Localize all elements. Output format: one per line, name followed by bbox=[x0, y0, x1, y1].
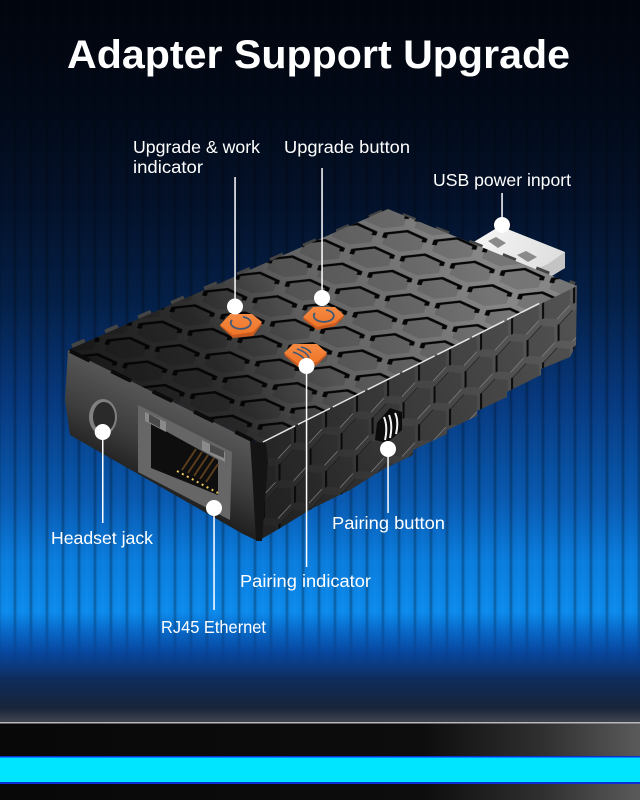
callout: upgrade button: Upgrade button bbox=[284, 137, 410, 157]
side face bbox=[250, 285, 577, 541]
callout: upgrade and work indicator bbox=[133, 137, 260, 314]
bottom bands bbox=[0, 722, 640, 800]
callout: headset jack bbox=[51, 424, 153, 548]
edge highlight bbox=[263, 303, 540, 442]
callout: upgrade and work indicator: indicator bbox=[133, 157, 203, 177]
top face with hexagon texture bbox=[68, 209, 577, 442]
front face bbox=[65, 350, 258, 541]
callout: RJ45 Ethernet bbox=[161, 500, 266, 637]
callout: upgrade and work indicator: Upgrade & work bbox=[133, 137, 260, 157]
title: Adapter Support Upgrade bbox=[67, 33, 570, 77]
callout: upgrade button bbox=[284, 137, 410, 306]
callout: RJ45 Ethernet: RJ45 Ethernet bbox=[161, 617, 266, 637]
callout: USB power inport: USB power inport bbox=[433, 170, 571, 190]
pairing button on side bbox=[375, 408, 402, 443]
button: upgrade and work indicator bbox=[220, 314, 262, 338]
USB plug bbox=[472, 226, 565, 281]
button: pairing indicator bbox=[284, 344, 327, 367]
callout: headset jack: Headset jack bbox=[51, 528, 153, 548]
button: upgrade bbox=[303, 307, 344, 330]
callout: pairing indicator: Pairing indicator bbox=[240, 571, 371, 591]
RJ45 ethernet port bbox=[138, 405, 232, 520]
callout: USB power inport bbox=[433, 170, 571, 233]
callout: pairing button: Pairing button bbox=[332, 513, 445, 533]
headset jack bbox=[89, 399, 117, 435]
callout: pairing button bbox=[332, 441, 445, 533]
callout: pairing indicator bbox=[240, 358, 371, 591]
device: adapter bbox=[65, 209, 577, 541]
